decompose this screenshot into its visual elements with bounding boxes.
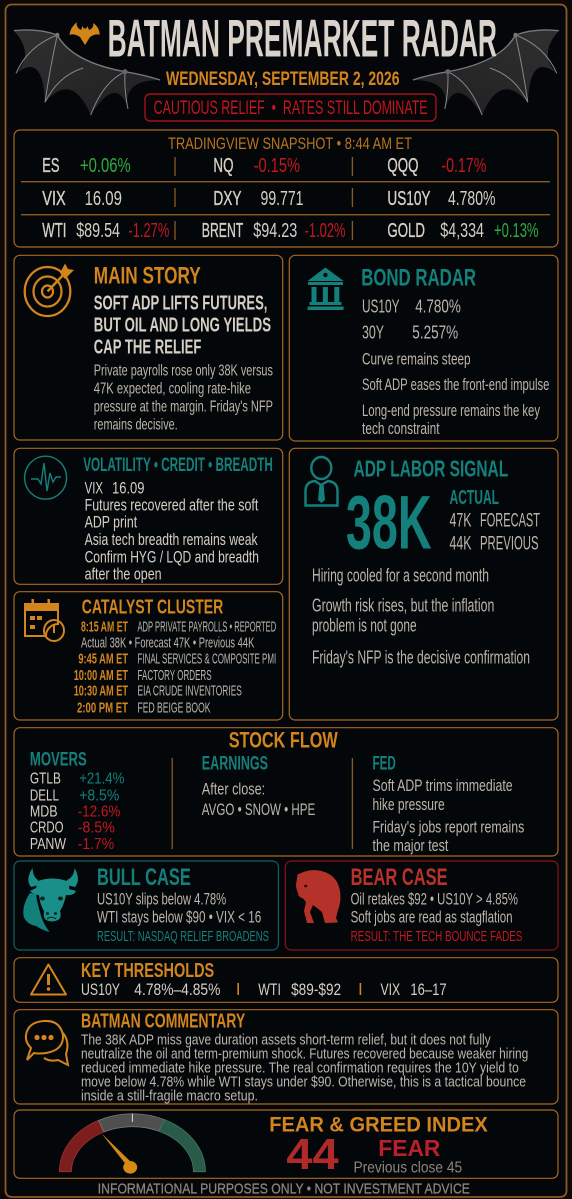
commodities row: $89.54 bbox=[76, 220, 120, 242]
threshold values: 16–17 bbox=[410, 980, 447, 999]
panel: fear and greed bbox=[14, 1110, 558, 1179]
story body: 47K expected, cooling rate-hike bbox=[94, 380, 251, 397]
movers list: PANW bbox=[30, 836, 67, 853]
fed column: Friday's jobs report remains bbox=[372, 818, 524, 836]
movers list: -1.7% bbox=[78, 836, 114, 853]
fed column: the major test bbox=[372, 837, 449, 855]
movers list: DELL bbox=[30, 788, 59, 805]
story body bbox=[94, 362, 273, 433]
heading: stock flow: STOCK FLOW bbox=[229, 727, 338, 752]
movers list: CRDO bbox=[30, 820, 63, 837]
commodities row: +0.13% bbox=[494, 220, 539, 242]
bond yields and notes: Curve remains steep bbox=[362, 349, 471, 368]
adp data bbox=[450, 487, 540, 554]
futures row: +0.06% bbox=[80, 155, 131, 177]
bear conditions bbox=[351, 890, 522, 945]
panel: tradingview snapshot bbox=[14, 130, 558, 247]
futures row: -0.17% bbox=[441, 155, 486, 177]
panel: key thresholds bbox=[14, 958, 558, 1002]
heading: batman commentary: BATMAN COMMENTARY bbox=[81, 1011, 246, 1033]
heading: fear and greed index: FEAR & GREED INDEX bbox=[269, 1114, 488, 1137]
threshold values: $89-$92 bbox=[291, 980, 341, 999]
panel: bear case bbox=[285, 861, 558, 950]
panel: batman commentary bbox=[14, 1010, 558, 1104]
heading: bond radar: BOND RADAR bbox=[361, 264, 476, 291]
bull conditions: RESULT: NASDAQ RELIEF BROADENS bbox=[97, 928, 269, 945]
icon: pulse bbox=[25, 456, 67, 499]
bull conditions: WTI stays below $90 • VIX < 16 bbox=[97, 908, 261, 926]
movers list: MOVERS bbox=[30, 750, 87, 771]
panel: catalyst cluster bbox=[14, 592, 283, 720]
commodities row: GOLD bbox=[387, 220, 425, 242]
catalyst schedule: FACTORY ORDERS bbox=[138, 668, 212, 684]
bond yields and notes: tech constraint bbox=[362, 419, 440, 438]
commodities row: -1.02% bbox=[305, 220, 346, 242]
rates row bbox=[42, 188, 496, 210]
adp notes bbox=[312, 565, 530, 667]
commodities row: -1.27% bbox=[128, 220, 169, 242]
volatility notes: 16.09 bbox=[112, 479, 144, 497]
panel: bond radar bbox=[289, 255, 558, 441]
threshold values: 4.78%–4.85% bbox=[134, 980, 220, 999]
heading: key thresholds: KEY THRESHOLDS bbox=[81, 960, 214, 982]
icon: bull bbox=[23, 868, 78, 932]
futures row: QQQ bbox=[387, 155, 418, 177]
movers list: -12.6% bbox=[78, 804, 120, 821]
big number: 38K bbox=[346, 480, 432, 565]
futures row bbox=[42, 155, 486, 177]
rates row: 4.780% bbox=[448, 188, 496, 210]
bull conditions bbox=[97, 890, 269, 945]
movers list: MDB bbox=[30, 804, 58, 821]
icon: calendar and clock bbox=[24, 599, 64, 641]
bond yields and notes: 4.780% bbox=[415, 297, 461, 317]
catalyst schedule: EIA CRUDE INVENTORIES bbox=[138, 684, 242, 700]
date: WEDNESDAY, SEPTEMBER 2, 2026 bbox=[166, 69, 400, 90]
status pill bbox=[145, 94, 436, 121]
icon: target bbox=[25, 264, 74, 316]
heading: catalyst cluster: CATALYST CLUSTER bbox=[82, 596, 224, 618]
commodities row: BRENT bbox=[202, 220, 243, 242]
catalyst schedule bbox=[74, 620, 276, 716]
earnings column bbox=[202, 754, 315, 819]
commodities row: WTI bbox=[42, 220, 66, 242]
panel: main story bbox=[14, 255, 283, 440]
adp data: 44K bbox=[450, 533, 472, 554]
earnings column: After close: bbox=[202, 780, 265, 798]
header bbox=[14, 10, 559, 121]
fed column: Soft ADP trims immediate bbox=[372, 777, 513, 795]
heading: volatility: VOLATILITY • CREDIT • BREADTH bbox=[83, 455, 273, 476]
catalyst schedule: FINAL SERVICES & COMPOSITE PMI bbox=[138, 652, 276, 668]
volatility notes: Futures recovered after the soft bbox=[85, 497, 259, 515]
catalyst schedule: FED BEIGE BOOK bbox=[138, 700, 211, 716]
threshold values: US10Y bbox=[81, 980, 120, 999]
fed column: FED bbox=[372, 754, 396, 775]
movers list: +8.5% bbox=[79, 788, 119, 805]
fed column: hike pressure bbox=[372, 796, 445, 814]
rates row: VIX bbox=[42, 188, 66, 210]
commentary body bbox=[81, 1031, 528, 1104]
catalyst schedule: ADP PRIVATE PAYROLLS • REPORTED bbox=[138, 620, 276, 636]
icon: chat bubbles bbox=[26, 1021, 68, 1065]
gauge bbox=[59, 1114, 205, 1174]
panel: adp labor signal bbox=[289, 448, 558, 720]
headline: SOFT ADP LIFTS FUTURES, bbox=[94, 292, 267, 314]
rates row: DXY bbox=[213, 188, 242, 210]
story body: Private payrolls rose only 38K versus bbox=[94, 362, 273, 379]
catalyst schedule: 10:00 AM ET bbox=[74, 668, 128, 684]
snapshot heading: TRADINGVIEW SNAPSHOT • 8:44 AM ET bbox=[168, 134, 412, 153]
fed column bbox=[372, 754, 524, 855]
adp data: ACTUAL bbox=[450, 487, 499, 509]
catalyst schedule: Actual 38K • Forecast 47K • Previous 44K bbox=[81, 635, 255, 651]
volatility notes: Asia tech breadth remains weak bbox=[85, 531, 258, 549]
volatility notes: after the open bbox=[85, 565, 162, 583]
heading: bear case: BEAR CASE bbox=[351, 864, 448, 891]
panel: bull case bbox=[14, 861, 278, 950]
rates row: 99.771 bbox=[260, 188, 304, 210]
commentary body: inside a still-fragile macro setup. bbox=[81, 1087, 258, 1104]
bull conditions: US10Y slips below 4.78% bbox=[97, 890, 226, 908]
footer disclaimer: INFORMATIONAL PURPOSES ONLY • NOT INVESTMENT ADVICE bbox=[98, 1181, 470, 1197]
threshold values bbox=[81, 980, 447, 999]
movers list: +21.4% bbox=[79, 771, 124, 788]
panel: volatility credit breadth bbox=[14, 448, 283, 584]
heading: main story: MAIN STORY bbox=[94, 262, 201, 289]
icon: bat logo bbox=[70, 22, 100, 45]
adp data: 47K bbox=[450, 511, 472, 532]
futures row: ES bbox=[42, 155, 60, 177]
heading: bull case: BULL CASE bbox=[97, 864, 191, 891]
index label: FEAR bbox=[378, 1135, 441, 1161]
movers list: GTLB bbox=[30, 771, 61, 788]
futures row: -0.15% bbox=[254, 155, 300, 177]
volatility notes: VIX bbox=[85, 479, 103, 497]
movers list bbox=[30, 750, 124, 853]
adp notes: problem is not gone bbox=[312, 615, 417, 636]
bond yields and notes bbox=[362, 297, 549, 438]
futures row: NQ bbox=[213, 155, 234, 177]
commodities row bbox=[42, 220, 539, 242]
headline bbox=[94, 292, 271, 359]
story body: remains decisive. bbox=[94, 416, 178, 433]
rates row: 16.09 bbox=[85, 188, 122, 210]
earnings column: EARNINGS bbox=[202, 754, 268, 775]
left bat wing bbox=[14, 30, 160, 115]
bond yields and notes: US10Y bbox=[362, 297, 400, 317]
needle bbox=[101, 1133, 137, 1174]
icon: warning triangle bbox=[31, 964, 66, 994]
earnings column: AVGO • SNOW • HPE bbox=[202, 801, 315, 819]
threshold values: VIX bbox=[380, 980, 400, 999]
catalyst schedule: 8:15 AM ET bbox=[81, 620, 128, 636]
rates row: US10Y bbox=[387, 188, 430, 210]
index value: 44 bbox=[286, 1130, 339, 1179]
movers list: -8.5% bbox=[78, 820, 115, 837]
panel: stock flow bbox=[14, 727, 558, 856]
bond yields and notes: 5.257% bbox=[412, 323, 458, 343]
icon: person bbox=[306, 457, 338, 506]
icon: bank building bbox=[308, 268, 344, 310]
story body: pressure at the margin. Friday's NFP bbox=[94, 399, 273, 416]
commodities row: $94.23 bbox=[253, 220, 297, 242]
headline: BUT OIL AND LONG YIELDS bbox=[94, 315, 271, 337]
threshold values: WTI bbox=[258, 980, 281, 999]
volatility notes: ADP print bbox=[85, 514, 138, 532]
catalyst schedule: 2:00 PM ET bbox=[77, 700, 128, 716]
catalyst schedule: 10:30 AM ET bbox=[74, 684, 128, 700]
volatility notes: Confirm HYG / LQD and breadth bbox=[85, 548, 259, 566]
right bat wing bbox=[413, 30, 559, 115]
status pill: CAUTIOUS RELIEF • RATES STILL DOMINATE bbox=[154, 98, 428, 119]
previous close: Previous close 45 bbox=[354, 1159, 462, 1176]
commodities row: $4,334 bbox=[440, 220, 484, 242]
catalyst schedule: 9:45 AM ET bbox=[78, 652, 128, 668]
icon: bear bbox=[296, 870, 340, 923]
bond yields and notes: 30Y bbox=[362, 323, 384, 343]
headline: CAP THE RELIEF bbox=[94, 337, 201, 359]
volatility notes bbox=[85, 479, 259, 583]
